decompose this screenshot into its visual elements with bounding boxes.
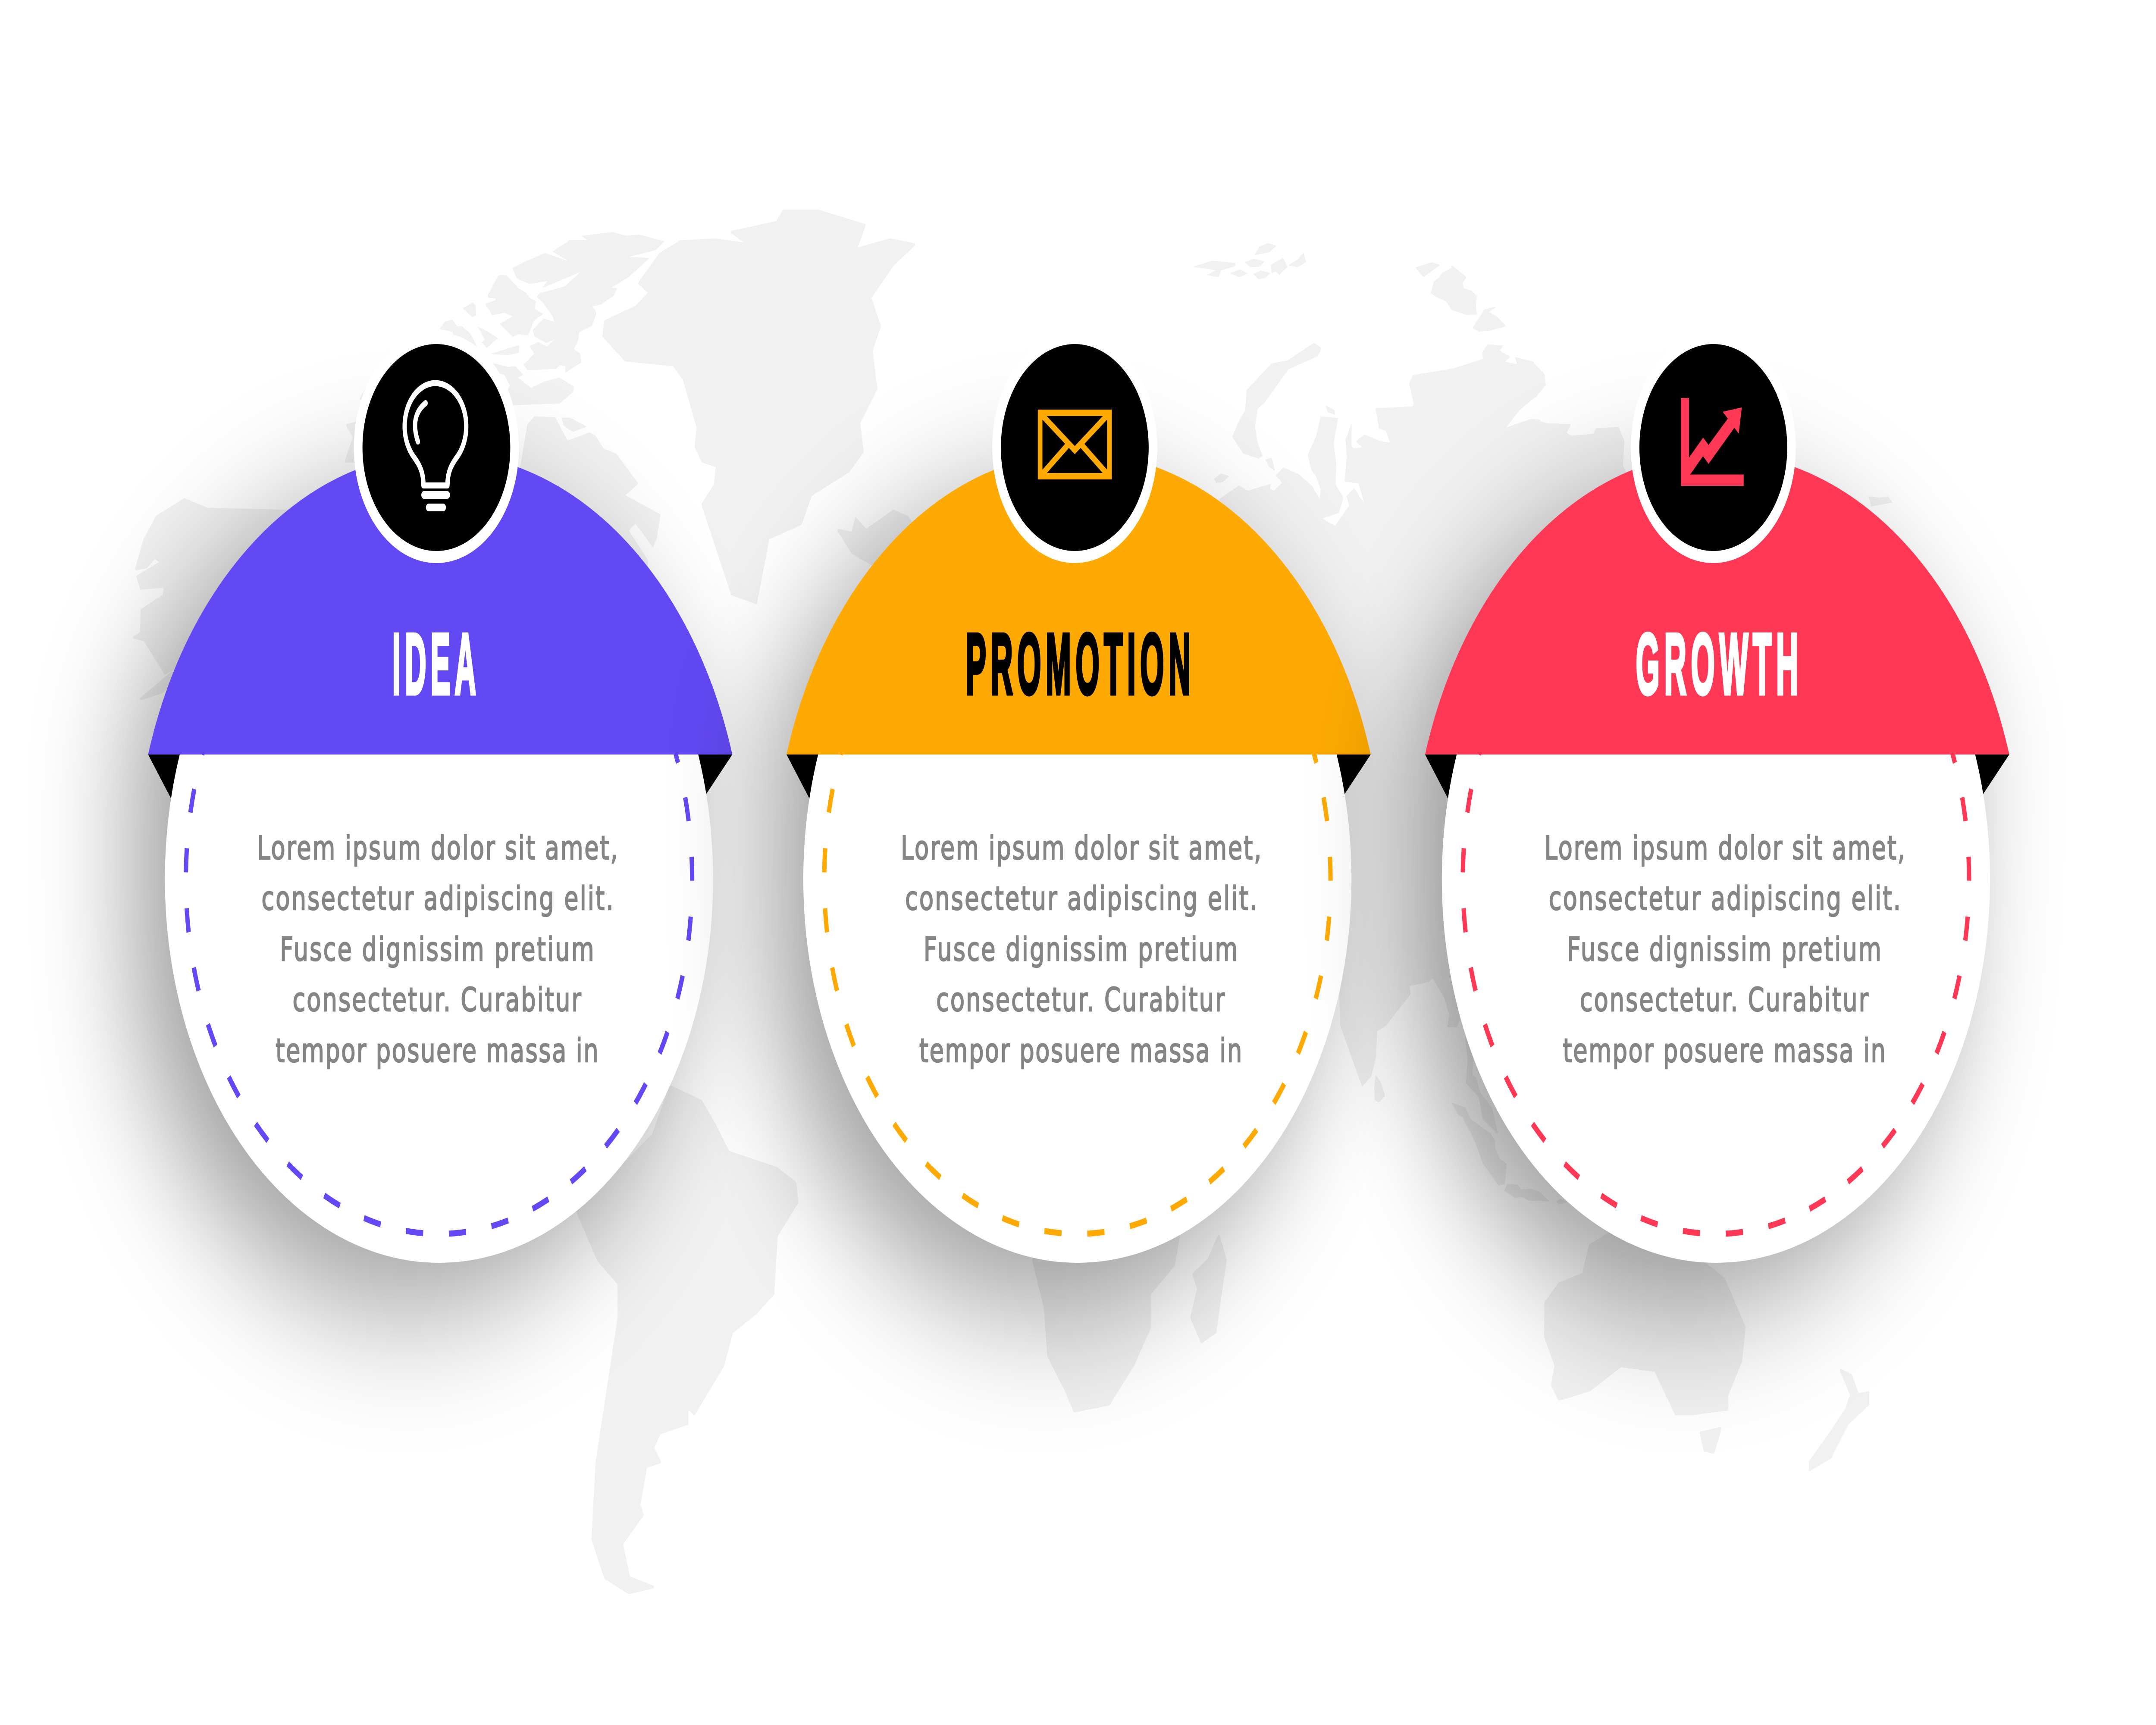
body text: Fusce dignissim pretium xyxy=(1567,930,1881,968)
panel: idea card xyxy=(117,332,732,1309)
dashed ring xyxy=(824,525,1331,1234)
card shadow xyxy=(755,494,1341,1309)
ribbon fold left xyxy=(1425,754,1459,799)
world map background xyxy=(134,211,1892,1593)
body text xyxy=(1545,829,1905,1070)
body text: consectetur. Curabitur xyxy=(292,981,581,1019)
body text: Fusce dignissim pretium xyxy=(280,930,594,968)
ribbon fold right xyxy=(1335,754,1371,794)
body text: consectetur adipiscing elit. xyxy=(1549,880,1901,917)
banner xyxy=(148,453,732,754)
body text xyxy=(901,829,1261,1070)
body text: consectetur. Curabitur xyxy=(1580,981,1869,1019)
card shadow xyxy=(1394,494,1979,1309)
panel: idea card: IDEA xyxy=(392,616,480,712)
body text: Lorem ipsum dolor sit amet, xyxy=(901,829,1261,867)
white circle xyxy=(803,495,1351,1263)
icon: light bulb xyxy=(354,332,519,563)
body text: Lorem ipsum dolor sit amet, xyxy=(257,829,618,867)
banner xyxy=(787,453,1371,754)
body text: consectetur adipiscing elit. xyxy=(905,880,1257,917)
body text: Lorem ipsum dolor sit amet, xyxy=(1545,829,1905,867)
card shadow xyxy=(117,494,702,1309)
panel: growth card xyxy=(1394,332,2009,1309)
body text xyxy=(257,829,618,1070)
icon: growth chart xyxy=(1631,332,1796,563)
dashed ring xyxy=(186,525,692,1234)
ribbon fold right xyxy=(696,754,732,794)
white circle xyxy=(1442,495,1990,1263)
white circle xyxy=(165,495,713,1263)
body text: consectetur. Curabitur xyxy=(936,981,1225,1019)
panel: promotion card xyxy=(755,332,1371,1309)
body text: consectetur adipiscing elit. xyxy=(261,880,614,917)
panel: promotion card: PROMOTION xyxy=(966,616,1195,712)
body text: tempor posuere massa in xyxy=(276,1032,599,1070)
body text: Fusce dignissim pretium xyxy=(924,930,1238,968)
dashed ring xyxy=(1463,525,1969,1234)
ribbon fold left xyxy=(787,754,820,799)
icon: envelope xyxy=(992,332,1157,563)
ribbon fold right xyxy=(1973,754,2009,794)
banner xyxy=(1425,453,2009,754)
panel: growth card: GROWTH xyxy=(1636,616,1803,712)
body text: tempor posuere massa in xyxy=(919,1032,1242,1070)
ribbon fold left xyxy=(148,754,182,799)
body text: tempor posuere massa in xyxy=(1563,1032,1886,1070)
